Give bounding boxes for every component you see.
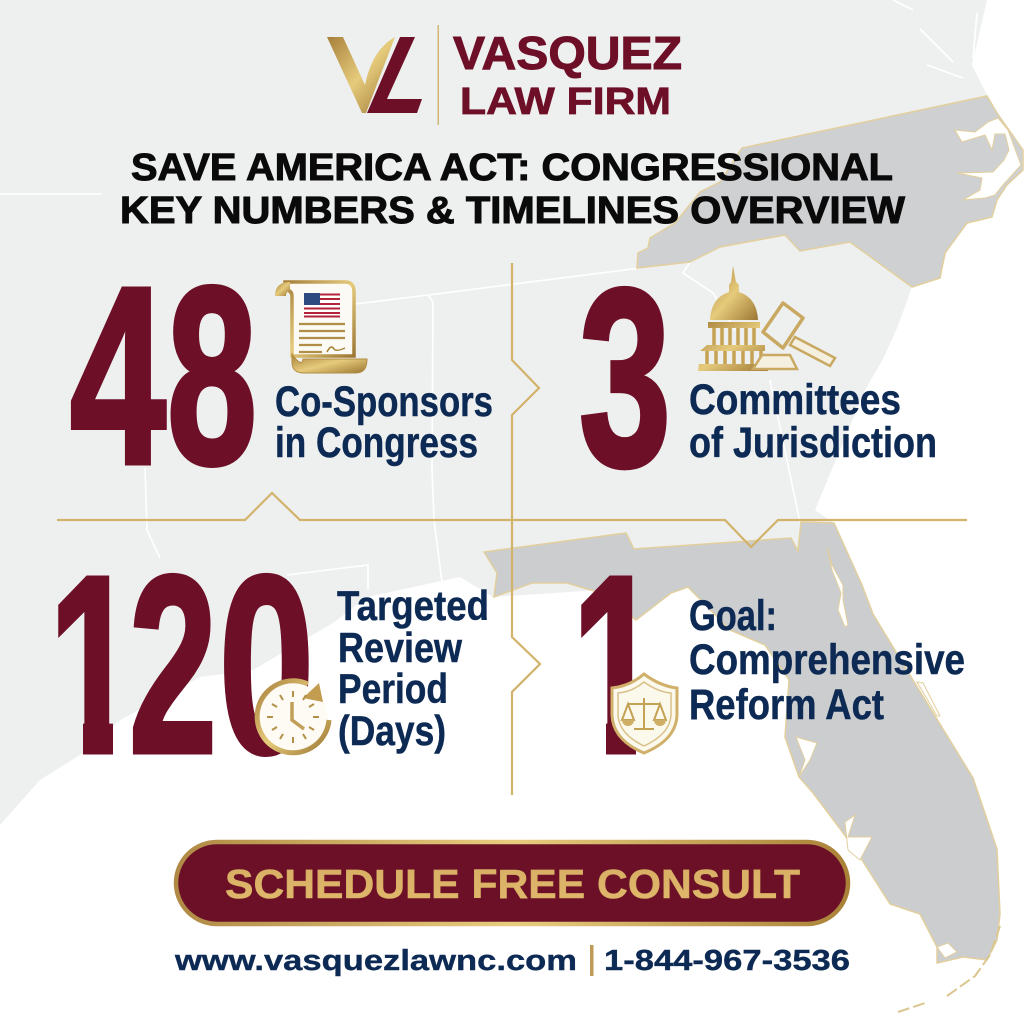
number 120 [58, 572, 309, 757]
label: targeted review period: (Days) [338, 707, 446, 754]
label: committees of jurisdiction: of Jurisdiction [689, 419, 937, 467]
icon: US flag [304, 293, 340, 317]
icon: scroll with flag [275, 282, 367, 373]
label: goal comprehensive reform act: Reform Act [689, 681, 884, 729]
logo divider [438, 25, 439, 125]
label: targeted review period [337, 582, 489, 754]
contact separator [590, 945, 594, 976]
title [120, 147, 905, 232]
call to action button [176, 842, 848, 924]
logo text: Vasquez: VASQUEZ [453, 27, 682, 79]
number 48: 4 [70, 234, 166, 517]
label: goal comprehensive reform act: Comprehensive [689, 636, 965, 684]
number 120: 2 [129, 523, 217, 806]
logo text: Law Firm: LAW FIRM [460, 81, 671, 123]
logo mark: V [327, 37, 395, 113]
number 48: 8 [167, 234, 257, 517]
logo [327, 25, 682, 125]
map: North Carolina [637, 96, 1023, 287]
label: targeted review period: Targeted [337, 582, 489, 629]
number 1: 1 [572, 523, 660, 806]
panel: committees [579, 236, 937, 519]
map: Florida Keys [898, 926, 1000, 1012]
label: co-sponsors in congress: Co-Sponsors [275, 378, 493, 426]
logo mark: L [367, 37, 422, 113]
panel: co-sponsors [70, 234, 493, 517]
phone number: 1-844-967-3536 [604, 945, 850, 977]
label: committees of jurisdiction [689, 376, 937, 467]
label: co-sponsors in congress: in Congress [275, 419, 478, 467]
label: goal comprehensive reform act: Goal: [689, 592, 777, 640]
contact line: www.vasquezlawnc.com [174, 945, 577, 977]
map: North Carolina sounds [955, 118, 1021, 200]
number 120: 1 [49, 523, 137, 806]
title: KEY NUMBERS & TIMELINES OVERVIEW [120, 190, 905, 232]
map: southeastern land mass [0, 0, 987, 825]
label: committees of jurisdiction: Committees [689, 376, 901, 424]
title: SAVE AMERICA ACT: CONGRESSIONAL [131, 147, 893, 189]
label: goal comprehensive reform act [689, 592, 965, 729]
label: targeted review period: Period [338, 665, 448, 712]
panel: goal [581, 576, 964, 755]
map: Florida [484, 522, 1000, 963]
label: co-sponsors in congress [275, 378, 493, 467]
icon: shield with scales [612, 674, 677, 753]
gold grid dividers [57, 263, 967, 795]
contact line [174, 945, 850, 977]
icon: clock with arrow [257, 681, 329, 753]
panel: review period [58, 572, 487, 757]
number 120: 0 [219, 523, 314, 806]
icon: capitol and gavel [698, 266, 835, 371]
map: Florida inlets [796, 547, 957, 958]
button text: SCHEDULE FREE CONSULT [225, 861, 800, 907]
label: targeted review period: Review [338, 624, 462, 671]
number 3: 3 [579, 236, 671, 519]
map: white state borders and rivers [0, 0, 977, 590]
